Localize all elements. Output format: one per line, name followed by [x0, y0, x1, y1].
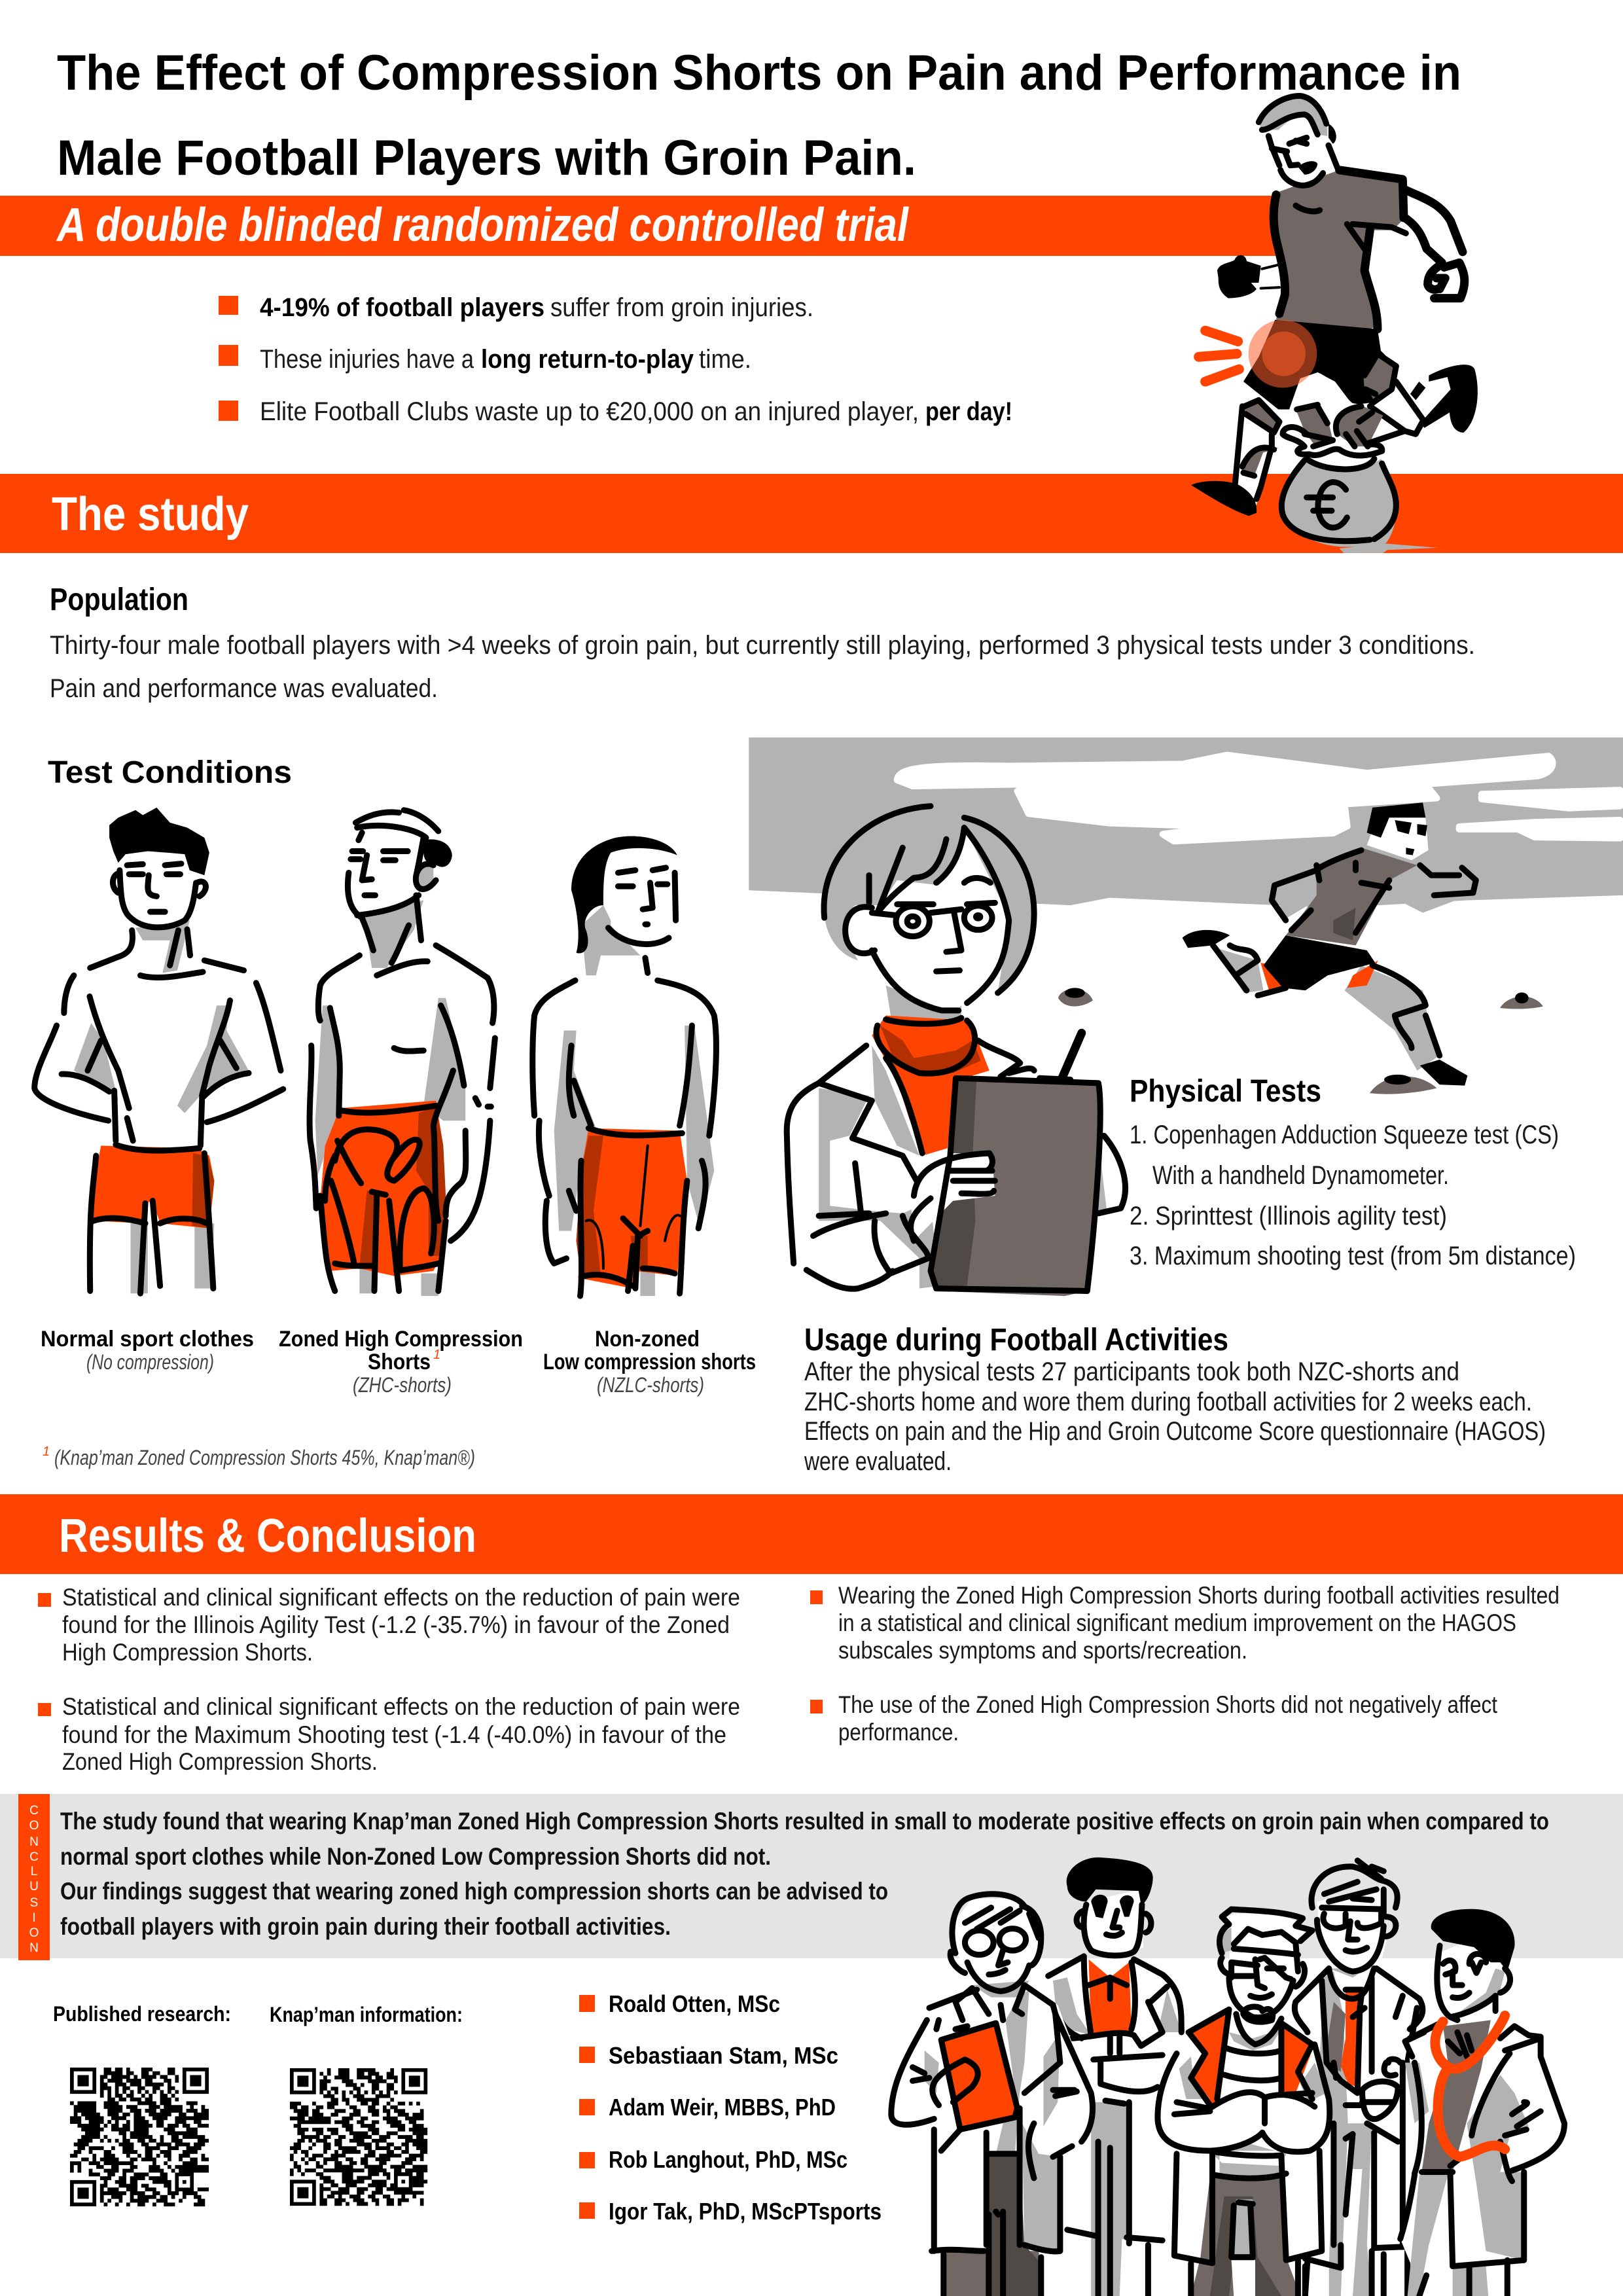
- panel: conclusion background: [0, 1794, 1623, 1958]
- illustration: five researchers: [891, 1857, 1565, 2296]
- section: intro bullets: Elite Football Clubs waste up to €20,000 on an injured player,: [260, 397, 919, 426]
- caption: non-zoned low compression shorts: Low compression shorts: [543, 1350, 756, 1374]
- illustration: sky, researcher and runner: [749, 738, 1623, 1296]
- section: physical tests: [1130, 1074, 1576, 1270]
- conclusion text: normal sport clothes while Non-Zoned Low Compression Shorts did not.: [60, 1843, 771, 1870]
- section: usage during football activities: Usage during Football Activities: [804, 1323, 1228, 1357]
- label: knap'man information: Knap’man information:: [270, 2003, 463, 2026]
- results: right column: performance.: [838, 1719, 959, 1746]
- caption: zoned high compression shorts: Shorts: [368, 1350, 431, 1374]
- results: left column: Statistical and clinical significant effects on the reduction of pain were: [62, 1584, 740, 1611]
- section: physical tests: 2. Sprinttest (Illinois agility test): [1130, 1202, 1447, 1230]
- conclusion tab: C: [29, 1850, 39, 1864]
- illustration: three men in shorts: [35, 808, 716, 1296]
- section: intro bullets: long return-to-play: [481, 345, 694, 374]
- authors list: Adam Weir, MBBS, PhD: [609, 2094, 836, 2121]
- conclusion tab: N: [29, 1941, 39, 1955]
- conclusion tab: C: [29, 1804, 39, 1818]
- conclusion tab: U: [29, 1880, 39, 1893]
- authors list: Rob Langhout, PhD, MSc: [609, 2146, 847, 2173]
- section: physical tests: With a handheld Dynamometer.: [1152, 1161, 1449, 1190]
- conclusion tab: [18, 1794, 50, 1960]
- results: right column: The use of the Zoned High Compression Shorts did not negatively affect: [838, 1691, 1498, 1718]
- caption: non-zoned low compression shorts: Non-zoned: [595, 1327, 700, 1352]
- results: right column: [810, 1582, 1560, 1746]
- figure: normal sport clothes: [35, 808, 283, 1293]
- results: right column: subscales symptoms and sports/recreation.: [838, 1637, 1247, 1664]
- section: population: Population: [50, 583, 188, 617]
- section: intro bullets: per day!: [925, 397, 1012, 426]
- banner: subtitle band: [0, 196, 1283, 256]
- conclusion text: [60, 1808, 1549, 1940]
- QR code: knap'man information: [290, 2068, 427, 2206]
- banner: the study band: [0, 474, 1623, 553]
- results: left column: High Compression Shorts.: [62, 1639, 313, 1666]
- section: population: Thirty-four male football players with >4 weeks of groin pain, but currently still playing, performed 3 physical tests under 3 conditions.: [50, 631, 1475, 660]
- caption: non-zoned low compression shorts: [543, 1327, 756, 1397]
- section: usage during football activities: After the physical tests 27 participants took both NZC-shorts and: [804, 1357, 1459, 1386]
- caption: zoned high compression shorts: [279, 1327, 523, 1397]
- authors list: Igor Tak, PhD, MScPTsports: [609, 2198, 882, 2225]
- title: Male Football Players with Groin Pain.: [57, 130, 916, 186]
- label: published research: Published research:: [53, 2002, 231, 2026]
- section: physical tests: Physical Tests: [1130, 1074, 1321, 1109]
- figure: researcher two: [1048, 1857, 1181, 2296]
- conclusion tab: O: [29, 1819, 39, 1833]
- section: intro bullets: 4-19% of football players: [260, 293, 544, 322]
- conclusion tab: N: [29, 1835, 39, 1849]
- conclusion text: Our findings suggest that wearing zoned high compression shorts can be advised to: [60, 1878, 888, 1905]
- section: intro bullets: These injuries have a: [260, 345, 474, 374]
- caption: normal sport clothes: (No compression): [86, 1350, 214, 1374]
- caption: zoned high compression shorts: 1: [433, 1348, 440, 1362]
- caption: non-zoned low compression shorts: (NZLC-shorts): [597, 1373, 704, 1397]
- pain marker: [1199, 320, 1317, 387]
- heading: results and conclusion: Results & Conclusion: [59, 1510, 476, 1562]
- results: right column: in a statistical and clinical significant medium improvement on the HAGOS: [838, 1609, 1516, 1636]
- title: The Effect of Compression Shorts on Pain and Performance in: [57, 45, 1461, 101]
- figure: researcher five with stethoscope: [1388, 1909, 1565, 2296]
- heading: test conditions: Test Conditions: [48, 755, 292, 790]
- results: left column: found for the Illinois Agility Test (-1.2 (-35.7%) in favour of the Zoned: [62, 1611, 730, 1638]
- figure: researcher with clipboard: [787, 806, 1125, 1296]
- conclusion tab: S: [30, 1896, 38, 1910]
- conclusion text: football players with groin pain during their football activities.: [60, 1913, 671, 1940]
- authors list: [579, 1990, 882, 2225]
- conclusion tab: O: [29, 1926, 39, 1940]
- section: intro bullets: suffer from groin injuries.: [550, 293, 813, 322]
- figure: researcher three with arms crossed: [1158, 1909, 1330, 2296]
- footnote: (Knap’man Zoned Compression Shorts 45%, Knap’man®): [54, 1446, 475, 1469]
- authors list: Sebastiaan Stam, MSc: [609, 2042, 838, 2069]
- caption: zoned high compression shorts: Zoned High Compression: [279, 1327, 523, 1352]
- banner: results band: [0, 1494, 1623, 1574]
- section: intro bullets: [219, 293, 1012, 426]
- figure: non-zoned low compression shorts: [533, 836, 716, 1296]
- conclusion tab: I: [32, 1911, 36, 1925]
- cones: [1058, 988, 1543, 1094]
- figure: researcher one with clipboard: [891, 1894, 1094, 2296]
- results: left column: Zoned High Compression Shorts.: [62, 1748, 378, 1775]
- caption: normal sport clothes: Normal sport clothes: [41, 1327, 254, 1352]
- heading: the study: The study: [52, 488, 249, 541]
- title: [57, 45, 1461, 186]
- conclusion tab: L: [31, 1865, 37, 1878]
- results: left column: [38, 1584, 740, 1775]
- footnote: 1: [43, 1444, 50, 1459]
- sky with clouds: [749, 738, 1623, 908]
- results: left column: Statistical and clinical significant effects on the reduction of pain were: [62, 1693, 740, 1720]
- subtitle: A double blinded randomized controlled trial: [56, 199, 910, 251]
- section: usage during football activities: were evaluated.: [804, 1447, 952, 1476]
- illustration: injured player kicking money bag: [1191, 96, 1478, 553]
- QR code: published research: [70, 2068, 209, 2206]
- figure: zoned high compression shorts: [310, 810, 495, 1296]
- results: left column: found for the Maximum Shooting test (-1.4 (-40.0%) in favour of the: [62, 1721, 726, 1748]
- authors list: Roald Otten, MSc: [609, 1990, 780, 2017]
- section: usage during football activities: [804, 1323, 1546, 1476]
- caption: normal sport clothes: [41, 1327, 254, 1374]
- figure: researcher four: [1293, 1861, 1424, 2296]
- section: intro bullets: time.: [699, 345, 751, 374]
- caption: zoned high compression shorts: (ZHC-shorts): [353, 1373, 452, 1397]
- figure: runner: [1183, 802, 1476, 1086]
- section: population: [50, 583, 1475, 703]
- section: population: Pain and performance was evaluated.: [50, 674, 438, 703]
